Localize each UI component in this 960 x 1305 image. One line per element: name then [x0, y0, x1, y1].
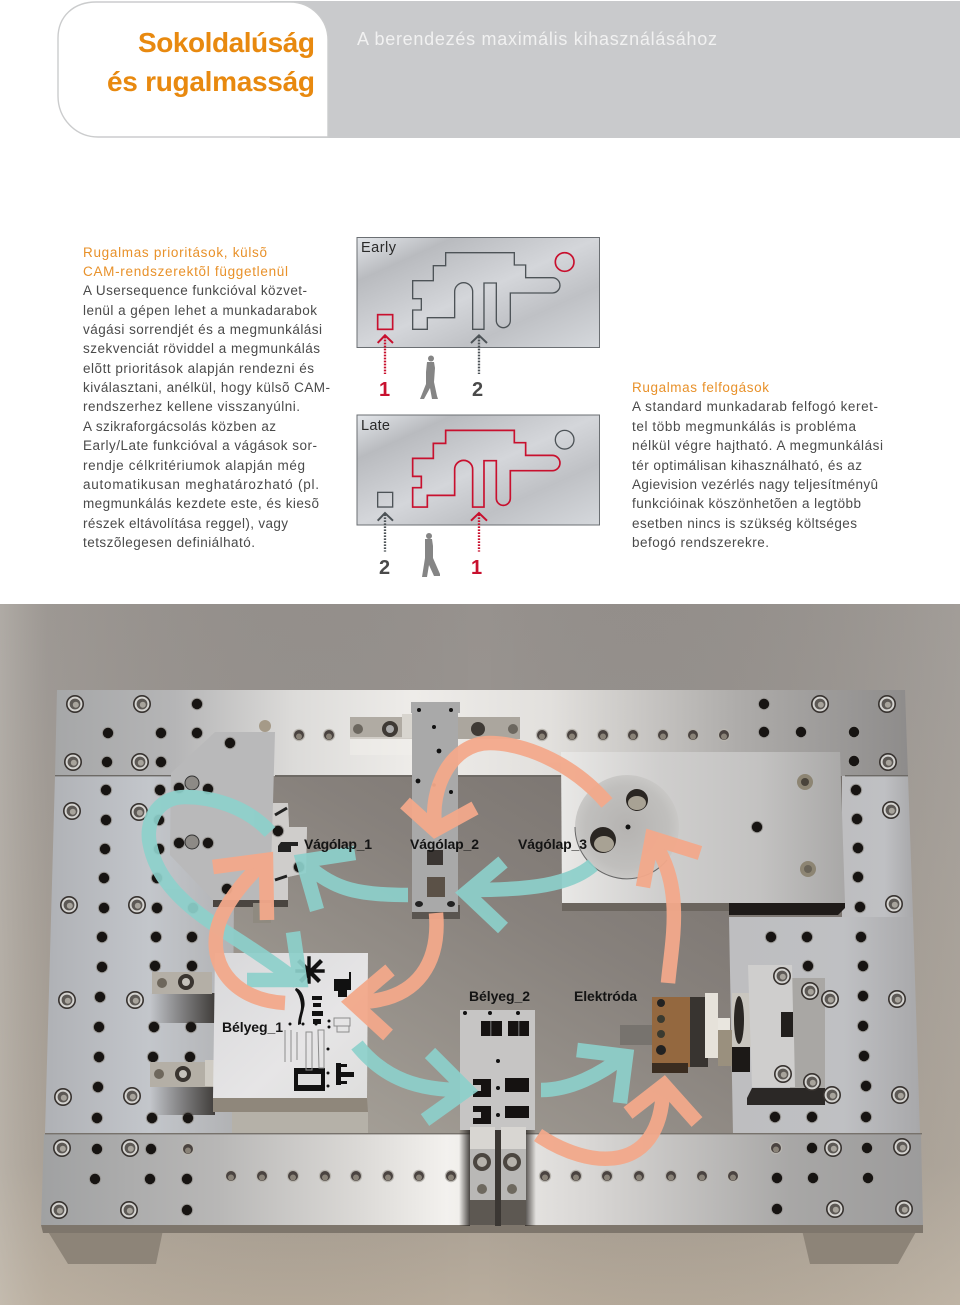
text block: left column: kiválasztani, anélkül, hogy külsõ CAM- — [83, 380, 330, 395]
text block: left column: megmunkálás kezdete este, és kiesõ — [83, 496, 319, 511]
text block: left column: A Usersequence funkcióval közvet- — [83, 283, 307, 298]
table feet — [47, 1230, 917, 1264]
table holes and screws — [50, 695, 913, 1219]
fixture: clamp block — [747, 965, 841, 1105]
text block: left column: Early/Late funkcióval a vágások sor- — [83, 438, 317, 453]
orange sequence arrows — [213, 743, 700, 1159]
text block: left column: A szikraforgácsolás közben az — [83, 419, 276, 434]
fixture labels: Bélyeg_2 — [469, 988, 530, 1004]
fixture: Vágólap_2 bar — [350, 702, 520, 919]
text block: right column: befogó rendszerekre. — [632, 535, 769, 550]
diagram: Late — [357, 415, 600, 579]
fixture: Vágólap_1 block — [170, 720, 307, 923]
title card — [58, 2, 328, 137]
fixture: Vágólap_3 block — [561, 752, 845, 915]
teal sequence arrows — [149, 797, 626, 1120]
diagram: Late: 1 — [471, 557, 482, 579]
text block: left column: szekvenciát röviddel a megmunkálás — [83, 341, 320, 356]
text block: left column: részek eltávolítása reggel), vagy — [83, 516, 288, 531]
text block: right column: funkcióinak köszönhetõen a legtöbb — [632, 496, 861, 511]
text block: left column: automatikusan meghatározható (pl. — [83, 477, 319, 492]
diagram: Late: 2 — [379, 557, 390, 579]
text block: right column: esetben nincs is szükség költséges — [632, 516, 857, 531]
text block: left column: rendje célkritériumok alapján még — [83, 458, 305, 473]
text block: right column: tér optimálisan kihasználható, és az — [632, 458, 862, 473]
icon: walking person — [422, 533, 440, 577]
text block: left column: tetszõlegesen definiálható. — [83, 535, 255, 550]
text block: right column: nélkül végre hajtható. A megmunkálási — [632, 438, 883, 453]
diagram: Early: Early — [361, 240, 397, 256]
fixture labels: Vágólap_2 — [410, 836, 479, 852]
fixture labels: Bélyeg_1 — [222, 1019, 283, 1035]
text block: right column: Agievision vezérlés nagy teljesítményû — [632, 477, 878, 492]
fixture labels: Elektróda — [574, 988, 637, 1004]
diagram: Early: 2 — [472, 379, 483, 401]
fixture: Bélyeg_1 block — [150, 953, 368, 1133]
text block: left column: vágási sorrendjét és a megmunkálási — [83, 322, 322, 337]
fixture labels: Vágólap_3 — [518, 836, 587, 852]
text block: left column: Rugalmas prioritások, külsõ — [83, 245, 267, 260]
text block: right column — [632, 380, 883, 550]
title: Sokoldalúság — [138, 27, 315, 58]
fixture labels — [222, 836, 637, 1035]
text block: right column: A standard munkadarab felfogó keret- — [632, 399, 878, 414]
photo: worktable with fixtures — [0, 604, 960, 1305]
text block: right column: tel több megmunkálás is probléma — [632, 419, 856, 434]
fixture: Bélyeg_2 block — [459, 1010, 536, 1226]
subtitle: A berendezés maximális kihasználásához — [357, 29, 717, 49]
fixture labels: Vágólap_1 — [304, 836, 372, 852]
text block: left column: elõtt prioritások alapján rendezni és — [83, 361, 314, 376]
text block: right column: Rugalmas felfogások — [632, 380, 769, 395]
diagram: Early: 1 — [379, 379, 390, 401]
fixture: electrode holder — [620, 993, 752, 1073]
title — [107, 27, 315, 97]
text block: left column — [83, 245, 330, 550]
text block: left column: rendszerhez kellene visszanyúlni. — [83, 399, 300, 414]
title: és rugalmasság — [107, 66, 315, 97]
diagram: Late: Late — [361, 418, 390, 434]
text block: left column: lenül a gépen lehet a munkadarabok — [83, 303, 317, 318]
header band — [58, 1, 960, 138]
icon: walking person — [420, 356, 438, 399]
table plate — [41, 690, 923, 1233]
text block: left column: CAM-rendszerektõl függetlenül — [83, 264, 288, 279]
diagram: Early — [357, 238, 600, 401]
